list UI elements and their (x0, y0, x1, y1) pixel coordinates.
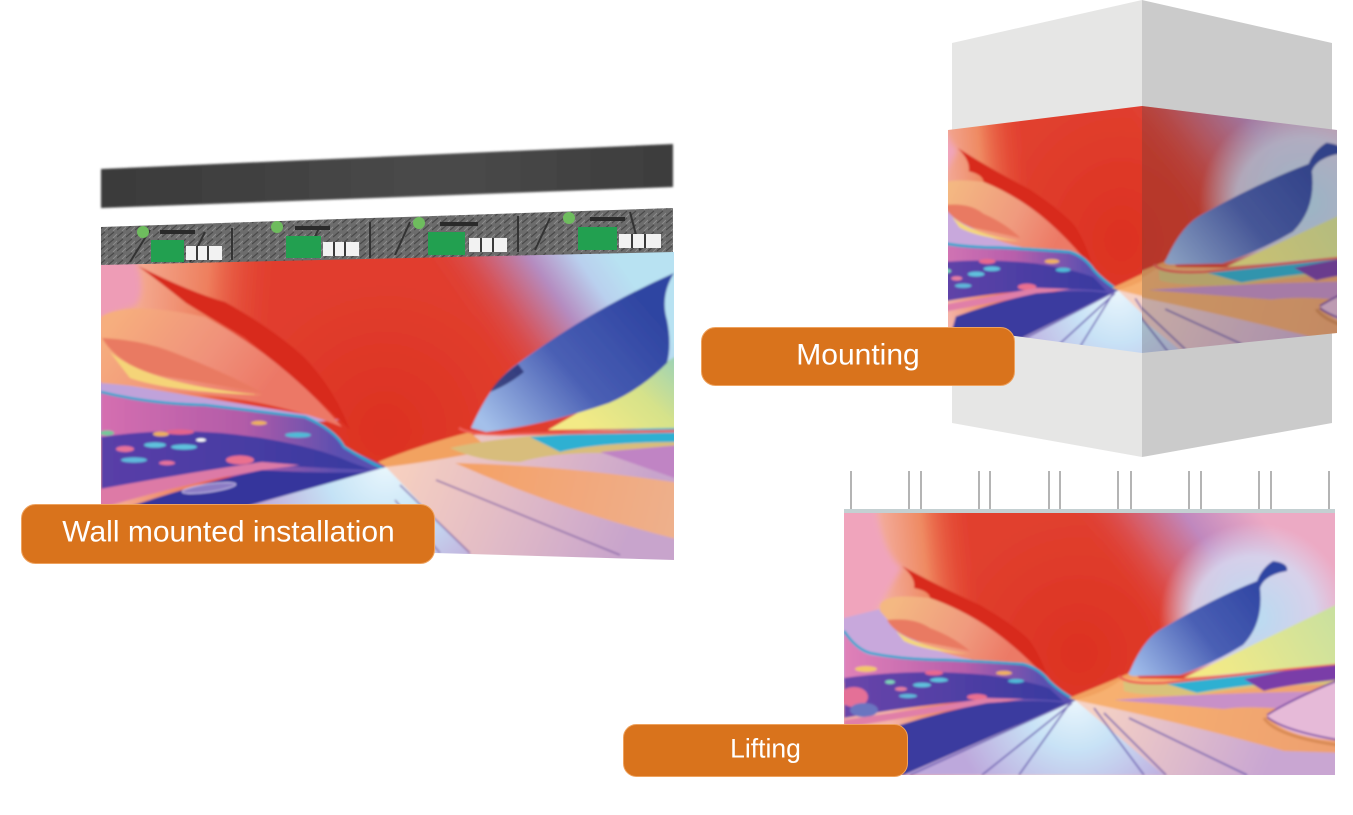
screen left face (948, 106, 1142, 353)
LED screen artwork (95, 245, 680, 565)
green connectors (137, 212, 575, 238)
pillar right face (1142, 0, 1332, 457)
pillar left face (952, 0, 1142, 457)
label: mounting: Mounting (796, 338, 920, 372)
LED screen artwork (844, 513, 1335, 775)
exposed module strip (101, 208, 673, 267)
label: wall mounted installation: Wall mounted installation (62, 516, 395, 548)
green boards (151, 227, 617, 262)
dark top cover bar (101, 144, 673, 208)
label: wall mounted installation (22, 504, 434, 564)
label: lifting (624, 724, 908, 776)
scene: wall mounted installation (95, 144, 680, 565)
scene: lifting (844, 471, 1335, 775)
screen right face (1142, 106, 1337, 353)
label: lifting: Lifting (730, 734, 801, 764)
top rail (844, 509, 1335, 513)
scene: mounting on a pillar (948, 0, 1337, 457)
hanging wires (851, 471, 1329, 509)
label: mounting (702, 328, 1014, 386)
white connectors (186, 234, 661, 260)
